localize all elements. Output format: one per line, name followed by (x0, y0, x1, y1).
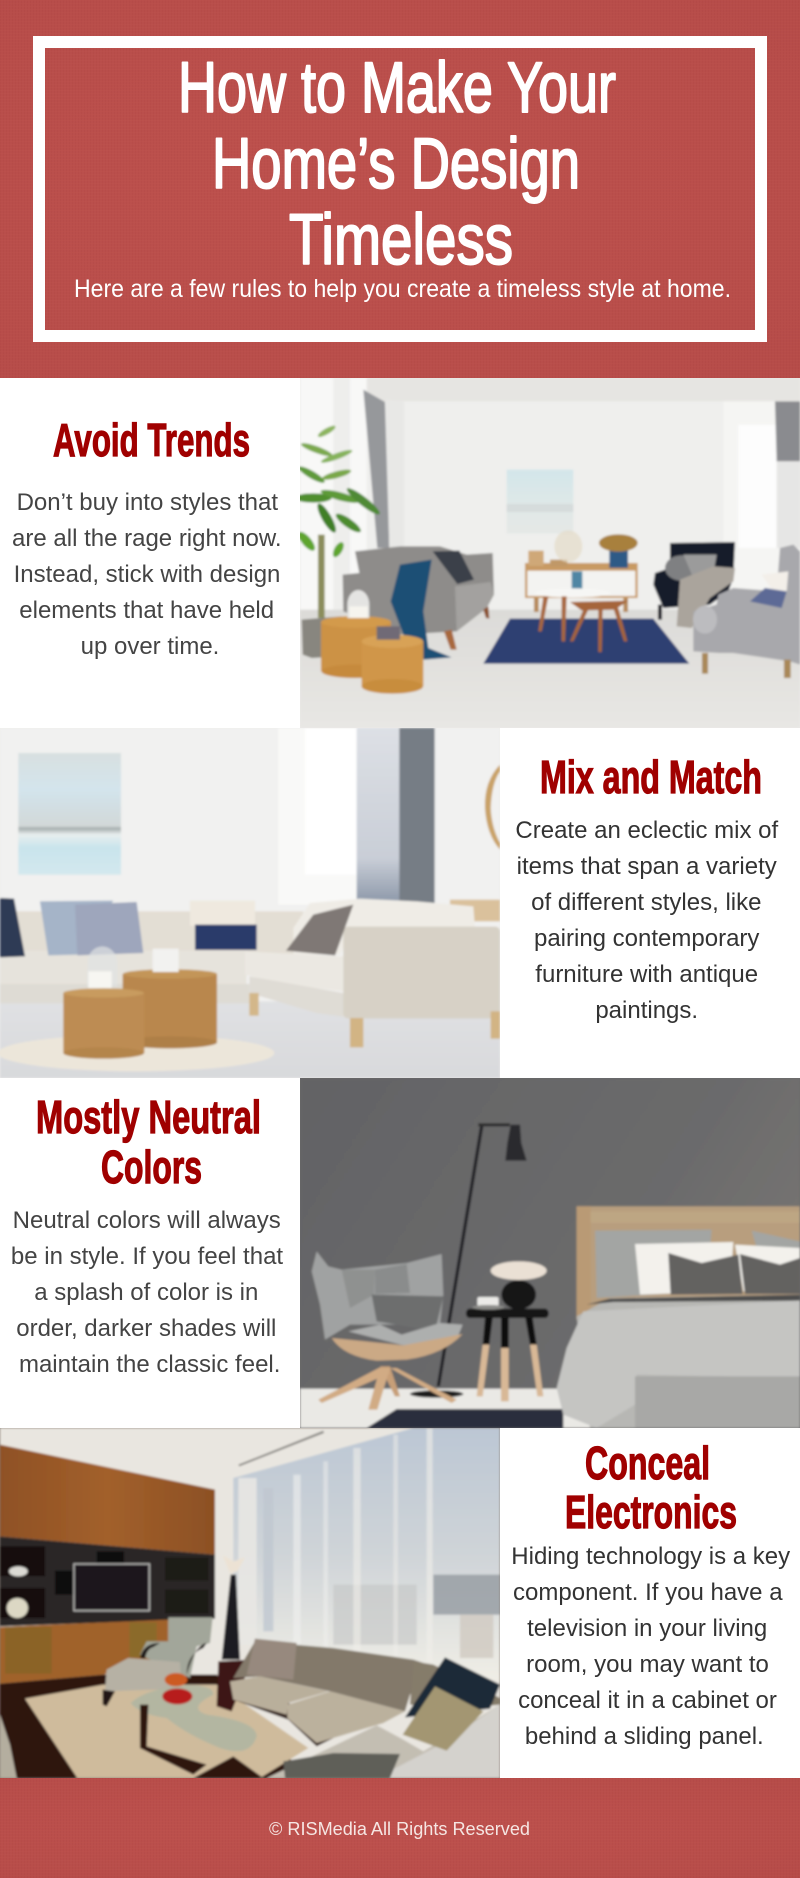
armchair and ottoman (103, 1617, 213, 1706)
text: avoid trends (12, 489, 282, 660)
side table (466, 1261, 549, 1401)
text: mix and match: pairing contemporary (534, 925, 759, 952)
text: conceal electronics: component. If you have a (513, 1579, 783, 1606)
round rug (0, 1035, 274, 1071)
blue throw (391, 560, 452, 660)
corner sofa (0, 1715, 17, 1778)
heading: mostly neutral colors: Colors (101, 1141, 202, 1193)
subtitle: Here are a few rules to help you create a timeless style at home. (74, 275, 731, 303)
dark armchair (653, 542, 735, 628)
pillows (595, 1230, 800, 1298)
window with sheer curtains (233, 1428, 500, 1681)
side table (217, 1660, 253, 1711)
nesting tables (534, 588, 628, 652)
text: mostly neutral colors: maintain the classic feel. (19, 1351, 280, 1378)
wall mirror (485, 765, 500, 850)
title frame (39, 42, 761, 336)
headboard (577, 1206, 800, 1320)
wood stools (321, 590, 423, 694)
photo: living room with wood wall (0, 1428, 500, 1778)
panel: avoid trends (0, 378, 300, 728)
text: mostly neutral colors: be in style. If you feel that (11, 1243, 283, 1270)
plant (295, 424, 382, 658)
sideboard (525, 530, 638, 612)
heading: mostly neutral colors (36, 1091, 261, 1193)
photo: sectional sofa (0, 728, 500, 1078)
floor (0, 1001, 500, 1078)
copyright: © RISMedia All Rights Reserved (269, 1819, 530, 1839)
heading: conceal electronics (565, 1437, 737, 1538)
footer (0, 1778, 800, 1878)
floor lamp (410, 1123, 527, 1398)
text: avoid trends: Don’t buy into styles that (17, 489, 278, 516)
header banner (0, 0, 800, 378)
photo: living room with navy rug (295, 378, 800, 728)
painting (507, 470, 573, 534)
text: mostly neutral colors: Neutral colors will always (13, 1207, 281, 1234)
text: conceal electronics (511, 1543, 790, 1750)
dark rug (367, 1409, 563, 1428)
panel: conceal electronics (500, 1428, 800, 1778)
patterned rug (25, 1685, 308, 1778)
floor (300, 1386, 592, 1428)
text: avoid trends: Instead, stick with design (14, 561, 280, 588)
text: mix and match: Create an eclectic mix of (515, 817, 779, 844)
text: conceal electronics: room, you may want to (526, 1651, 769, 1678)
painting (18, 753, 121, 875)
title: Timeless (289, 201, 513, 280)
text: conceal electronics: behind a sliding panel. (525, 1723, 764, 1750)
media unit (0, 1536, 215, 1626)
bed (557, 1295, 800, 1428)
title: Home’s Design (212, 125, 580, 204)
gray wing chair (693, 545, 800, 678)
photo: gray bedroom (300, 1078, 800, 1428)
floor (0, 1675, 307, 1778)
heading: mostly neutral colors: Mostly Neutral (36, 1091, 261, 1143)
wood wall (0, 1445, 215, 1555)
text: avoid trends: are all the rage right now. (12, 525, 282, 552)
window and curtains (303, 728, 436, 904)
text: mix and match: furniture with antique (535, 961, 758, 988)
sofa (0, 898, 500, 1047)
gray sofa (343, 546, 494, 650)
text: mix and match: of different styles, like (531, 889, 761, 916)
panel: mix and match (500, 728, 800, 1078)
heading: avoid trends: Avoid Trends (53, 414, 250, 466)
text: conceal electronics: Hiding technology is a key (511, 1543, 790, 1570)
text: mix and match: items that span a variety (517, 853, 777, 880)
title (178, 49, 616, 280)
television (73, 1563, 150, 1611)
armchair (312, 1251, 463, 1410)
floor lamp (222, 1555, 245, 1660)
sofa (230, 1639, 500, 1778)
glass table (131, 1673, 263, 1778)
text: avoid trends: up over time. (81, 633, 219, 660)
title: How to Make Your (178, 49, 616, 128)
text: mostly neutral colors (11, 1207, 283, 1378)
text: mostly neutral colors: a splash of color is in (34, 1279, 258, 1306)
navy rug (483, 619, 689, 664)
text: mostly neutral colors: order, darker shades will (16, 1315, 276, 1342)
panel: mostly neutral colors (0, 1078, 300, 1428)
text: mix and match (515, 817, 779, 1024)
text: avoid trends: elements that have held (19, 597, 274, 624)
vase and flowers (501, 1280, 536, 1309)
lower cabinets (0, 1620, 168, 1684)
text: conceal electronics: television in your living (527, 1615, 767, 1642)
wood stools (63, 946, 217, 1059)
text: mix and match: paintings. (595, 997, 698, 1024)
text: conceal electronics: conceal it in a cabinet or (518, 1687, 777, 1714)
heading: conceal electronics: Conceal (585, 1437, 710, 1489)
cushions (0, 898, 25, 957)
